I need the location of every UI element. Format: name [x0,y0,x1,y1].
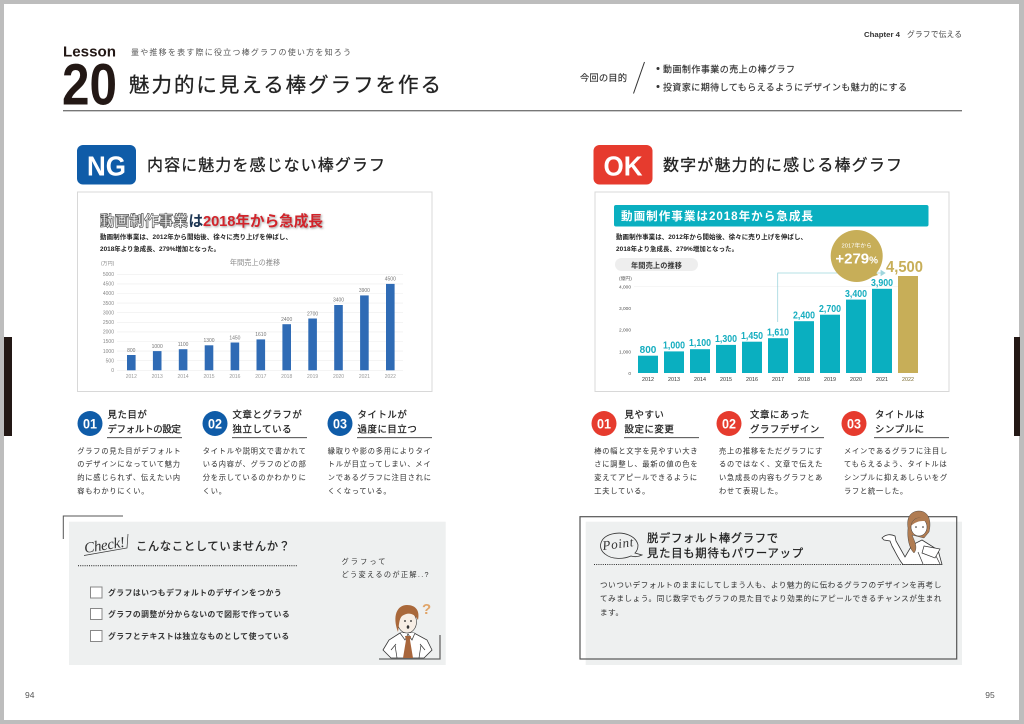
NG point 02 [202,409,307,495]
OK bar chart: 2020 [850,377,862,383]
OK point 02: グラフデザイン [750,424,820,434]
point body text [600,580,942,617]
NG bar chart: 1610 [255,332,267,338]
icon: puzzled man [379,601,440,659]
NG bar chart: 2017 [255,374,267,380]
OK point 03: シンプルに [875,424,925,434]
NG point 01: デフォルトの設定 [108,424,182,434]
OK bar chart: 1,000 [663,340,685,352]
OK point 03 [842,409,949,495]
NG bar chart: 4000 [103,291,114,297]
OK bar chart: 2015 [720,377,732,383]
NG bar chart: 500 [106,358,114,364]
NG point 01: のデザインになっていて魅力 [77,460,181,469]
NG bar chart: 2012 [126,374,137,380]
NG point 02: くい。 [203,486,227,495]
OK point 02: るのではなく、文章で伝えた [719,460,823,469]
handwritten thought [342,557,428,579]
OK bar chart: 2018 [798,377,810,383]
NG bar chart: 3500 [103,301,114,307]
goals of this lesson: 投資家に期待してもらえるようにデザインも魅力的にする [663,82,907,92]
goals of this lesson: 今回の目的 [580,72,627,83]
check label handwritten: Check! [83,535,126,557]
OK bar chart: 2019 [824,377,836,383]
NG point 02: 分を示しているのかわかりに [203,473,307,482]
OK bar chart: 1,100 [689,338,711,349]
NG chart title: 動画制作事業 [100,212,188,230]
NG point 02: 02 [208,416,222,432]
NG heading text: 内容に魅力を感じない棒グラフ [147,156,385,174]
point heading: 見た目も期待もパワーアップ [647,546,804,560]
NG point 03: 過度に目立つ [358,424,417,434]
OK bar chart: 2014 [694,377,706,383]
NG bar chart: 2018 [281,374,292,380]
OK bar chart: 2016 [746,377,758,383]
growth arrow [778,270,885,322]
point heading: 脱デフォルト棒グラフで [647,531,778,545]
OK bar chart: 2,400 [793,310,815,322]
left page number: 94 [25,690,35,700]
NG chart title: 2018年から急成長 [204,213,324,231]
NG bar chart: 1500 [103,339,114,345]
OK bar chart: 1,450 [741,331,763,342]
OK bar chart: 3,000 [619,306,631,312]
lesson header [62,44,441,118]
OK point 01: 工夫している。 [594,486,650,495]
NG bar chart: 2400 [281,317,292,323]
NG point 02: タイトルや説明文で書かれて [203,446,307,456]
check item 1: グラフはいつもデフォルトのデザインをつかう [108,588,282,598]
NG bar chart: 4500 [103,282,114,288]
OK bar chart: 1,610 [767,328,789,338]
NG bar chart: 3900 [359,288,370,294]
OK point 01: 設定に変更 [624,424,674,434]
OK chart title band: 動画制作事業は2018年から急成長 [621,209,813,223]
check item 2: グラフの調整が分からないので図形で作っている [108,609,290,619]
point body text: ます。 [600,608,624,617]
lesson title: 魅力的に見える棒グラフを作る [129,74,441,97]
NG bar chart: 2019 [307,374,318,380]
OK point 02: 文章にあった [750,409,810,420]
point speech bubble: Point [601,534,635,553]
NG point 02: いる内容が、グラフのどの部 [203,460,307,469]
NG badge: NG [87,150,126,182]
OK point 03: シンプルに抑えあしらいをグ [844,473,948,482]
handwritten thought: グラフって [342,557,386,566]
NG bar chart: 1300 [203,338,215,344]
NG bar chart: 2015 [203,374,215,380]
NG bar chart: 2500 [103,320,114,326]
icon: puzzled man: ? [422,601,431,618]
growth callout circle: +279% [835,250,878,268]
NG point 03: 03 [333,416,347,432]
right page tab [1014,337,1020,436]
NG point 01: 容もわかりにくい。 [77,486,149,495]
NG chart title [100,212,324,231]
OK chart title band [614,205,928,226]
NG bar chart: 1000 [152,344,163,350]
OK point 03: 03 [847,416,861,432]
highlighted 2022 bar [898,276,918,373]
OK heading [594,145,902,184]
panel: OK chart [595,192,949,392]
right page number: 95 [985,690,995,700]
OK chart description [616,232,807,253]
OK badge: OK [604,150,642,182]
NG bar chart: 4500 [385,276,396,282]
OK badge [594,145,652,184]
icon: presenting woman [882,511,942,564]
OK bar chart: 2022 [902,377,914,383]
point speech bubble [601,533,642,558]
growth callout circle [831,230,883,282]
OK bar chart: (億円) [619,275,632,282]
NG chart description: 2018年より急成長、279%増加となった。 [100,244,220,253]
OK point 01: 変えてアピールできるように [594,473,698,482]
NG point 01: グラフの見た目がデフォルト [77,446,181,456]
point body text: ついついデフォルトのままにしてしまう人も、より魅力的に伝わるグラフのデザインを再考し [600,580,942,590]
OK chart description: 動画制作事業は、2012年から開始後、徐々に売り上げを伸ばし、 [616,232,807,241]
OK bar chart: 1,300 [715,334,737,345]
OK bar chart: 3,400 [845,289,867,300]
OK bar chart: 0 [628,371,631,377]
OK point 01: さに調整し、最新の値の色を [594,460,698,469]
NG point 03: ンであるグラフに注目されに [328,473,432,482]
left page tab [4,337,12,436]
NG bar chart: 2020 [333,374,344,380]
OK bar chart: 2013 [668,377,680,383]
OK point 01: 01 [597,416,611,432]
NG chart title: は [188,214,204,230]
NG point 03 [328,409,432,495]
point heading [647,531,804,560]
NG bar chart: 2021 [359,374,370,380]
chart subtitle pill: 年間売上の推移 [631,261,682,270]
NG badge [77,145,136,184]
NG bar chart: 5000 [103,272,114,278]
NG point 03: トルが目立ってしまい、メイ [328,460,431,469]
NG bar chart: 2000 [103,330,114,336]
NG bar chart: 1000 [103,349,114,355]
NG point 03: 縁取りや影の多用によりタイ [328,446,432,456]
OK point 03: タイトルは [875,409,925,420]
NG bar chart: 2016 [229,374,241,380]
OK point 01: 見やすい [624,409,664,420]
NG point 01: 見た目が [108,409,147,420]
NG bar chart: 800 [127,348,136,354]
NG bar chart: 1450 [229,336,241,342]
2022 value label: 4,500 [886,259,923,276]
OK point 02: 売上の推移をただグラフにす [719,446,823,456]
OK point 03: メインであるグラフに注目し [844,446,948,456]
NG bar chart: 3000 [103,310,114,316]
OK bar chart: 2021 [876,377,888,383]
OK bar chart: 4,000 [619,284,631,290]
OK point 03: ラフと統一した。 [844,486,908,495]
NG point 03: くくなっている。 [328,486,391,495]
NG point 01: 01 [83,416,97,432]
NG bar chart: 年間売上の推移 [230,258,280,267]
panel: NG chart [78,192,432,392]
chapter label: グラフで伝える [907,29,962,39]
goals of this lesson [580,62,907,94]
NG bar chart: 2014 [178,374,189,380]
NG chart description [100,232,292,253]
OK bar chart: 2,700 [819,304,841,315]
NG bar chart [101,258,403,380]
NG bar chart: 2700 [307,312,318,318]
OK point 02: い急成長の内容もグラフとあ [719,473,823,482]
OK bar chart [619,230,923,383]
growth callout circle: 2017年から [842,242,872,250]
NG chart description: 動画制作事業は、2012年から開始後、徐々に売り上げを伸ばし、 [100,232,292,241]
NG point 02: 文章とグラフが [232,409,302,420]
check heading: こんなことしていませんか？ [136,540,290,553]
OK heading text: 数字が魅力的に感じる棒グラフ [663,156,902,174]
handwritten thought: どう変えるのが正解..? [342,570,428,579]
OK point 02: 02 [722,416,736,432]
chart subtitle pill [615,258,698,271]
subtitle: 量や推移を表す際に役立つ棒グラフの使い方を知ろう [131,47,351,57]
OK point 01: 棒の幅と文字を見やすい大き [594,446,698,456]
NG heading [77,145,385,184]
OK point 02 [716,409,824,495]
chapter label [864,29,962,39]
NG point 01: 的に感じられず、伝えたい内 [77,473,181,482]
check item 3: グラフとテキストは独立なものとして使っている [108,631,290,641]
panel: check list [63,516,446,665]
lesson number: 20 [62,52,117,118]
panel: point [580,511,962,665]
OK bar chart: 2012 [642,377,654,383]
goals of this lesson: 動画制作事業の売上の棒グラフ [663,64,795,74]
OK bar chart: 1,000 [619,349,631,355]
NG bar chart: 2013 [152,374,163,380]
OK bar chart: 800 [640,345,657,356]
NG bar chart: 3400 [333,298,344,304]
OK bar chart: 2,000 [619,328,631,334]
NG bar chart: 2022 [385,374,396,380]
lesson label: Lesson [63,44,116,60]
OK bar chart: 2017 [772,377,784,383]
NG chart title: 2018年から急成長 [203,212,323,230]
OK point 03: てもらえるよう、タイトルは [844,460,948,469]
NG point 02: 独立している [232,424,292,434]
chapter label: Chapter 4 [864,30,901,39]
NG bar chart: 0 [111,368,114,374]
NG point 03: タイトルが [358,409,407,420]
OK bar chart: 3,900 [871,278,893,289]
OK point 02: わせて表現した。 [719,486,783,495]
OK chart description: 2018年より急成長、279%増加となった。 [616,244,738,253]
OK point 01 [592,409,699,495]
NG bar chart: 1100 [178,342,189,348]
NG bar chart: (万円) [101,261,115,267]
point body text: てみましょう。同じ数字でもグラフの見た目でより効果的にアピールできるチャンスが生まれ [600,593,942,603]
NG point 01 [77,409,182,495]
header rule [63,110,962,112]
